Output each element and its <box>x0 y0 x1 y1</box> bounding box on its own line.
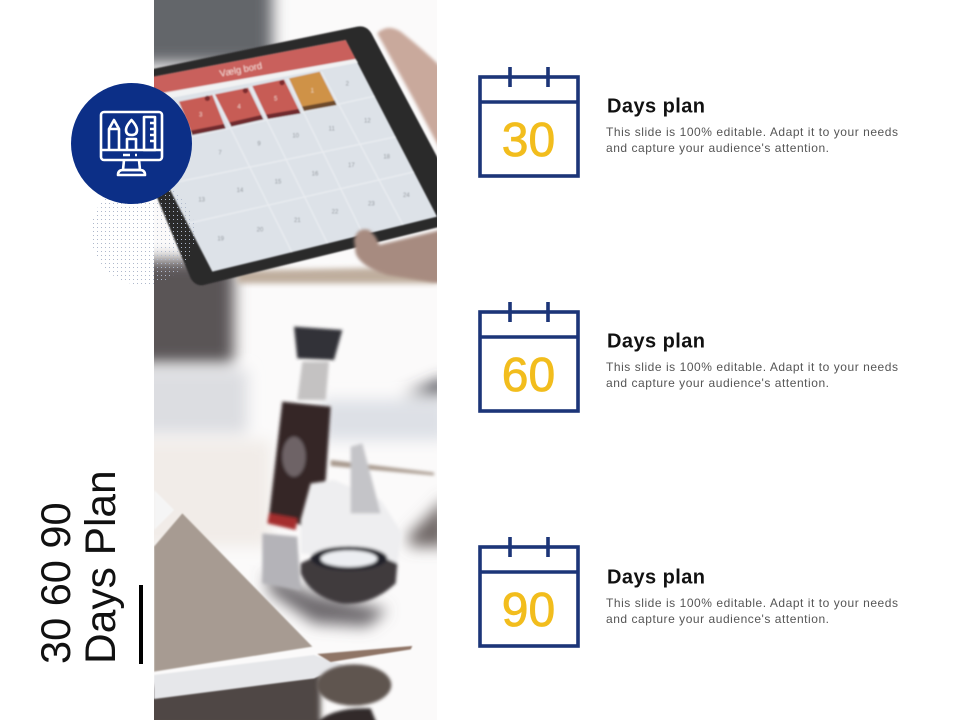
title: 30 60 90 Days Plan: Days Plan <box>78 470 125 664</box>
calendar tiles <box>179 72 337 135</box>
calendar header <box>154 39 356 94</box>
text block: 60 days plan: Days plan <box>607 330 705 352</box>
bottom table shadow <box>147 673 321 720</box>
bottle <box>262 327 342 590</box>
calendar numbers: 21 <box>294 218 301 224</box>
calendar numbers: 19 <box>217 236 225 242</box>
stone <box>314 664 391 720</box>
text block: 30 days plan <box>606 96 898 155</box>
glass jar <box>301 443 434 604</box>
calendar icon: 60: 60 <box>502 349 555 402</box>
hand behind tablet <box>376 26 437 148</box>
title: 30 60 90 Days Plan: 30 60 90 <box>32 502 79 664</box>
calendar grid lines <box>188 96 414 252</box>
calendar numbers: 23 <box>368 201 375 207</box>
calendar numbers <box>198 81 410 242</box>
text block: 30 days plan: and capture your audience's attention. <box>606 141 829 155</box>
calendar numbers: 10 <box>292 134 300 140</box>
text block: 30 days plan: This slide is 100% editable. Adapt it to your needs <box>606 125 898 139</box>
pen <box>154 655 344 699</box>
calendar numbers: 5 <box>274 97 278 103</box>
text block: 60 days plan: and capture your audience's attention. <box>606 376 829 390</box>
calendar numbers: 18 <box>383 155 391 161</box>
calendar icon: 90 <box>478 537 580 648</box>
tablet body <box>154 25 437 286</box>
icon badge: monitor with design tools <box>71 83 192 204</box>
calendar numbers: 16 <box>312 171 319 177</box>
calendar numbers: 7 <box>218 150 222 156</box>
calendar numbers: 9 <box>257 142 261 148</box>
tablet screen <box>154 39 437 272</box>
calendar numbers: 20 <box>257 227 264 233</box>
thumb and lower hand <box>354 229 441 283</box>
calendar numbers: 4 <box>237 105 241 111</box>
calendar numbers: 22 <box>332 210 339 216</box>
tablet screen: Vælg bord <box>219 61 263 79</box>
background blurred shapes <box>134 0 447 627</box>
calendar numbers: 11 <box>329 126 335 132</box>
text block: 90 days plan: This slide is 100% editable. Adapt it to your needs <box>606 596 898 610</box>
dotted halftone decoration <box>93 191 194 284</box>
calendar numbers: 1 <box>311 89 315 95</box>
calendar icon: 30 <box>478 67 580 178</box>
text block: 30 days plan: Days plan <box>607 96 705 118</box>
calendar numbers: 17 <box>348 163 355 169</box>
calendar icon: 60 <box>478 302 580 413</box>
calendar icon: 90: 90 <box>502 584 555 637</box>
text block: 90 days plan <box>606 566 898 626</box>
calendar numbers: 13 <box>198 197 206 203</box>
text block: 60 days plan: This slide is 100% editable. Adapt it to your needs <box>606 360 898 374</box>
text block: 90 days plan: Days plan <box>607 566 705 588</box>
photo: tablet calendar and desk objects <box>154 0 437 720</box>
calendar numbers: 12 <box>364 119 371 125</box>
text block: 90 days plan: and capture your audience's attention. <box>606 612 829 626</box>
paper triangle <box>154 513 312 672</box>
calendar icon: 30: 30 <box>502 114 555 167</box>
calendar numbers: 24 <box>403 193 410 199</box>
text block: 60 days plan <box>606 330 898 390</box>
calendar numbers: 15 <box>275 180 282 186</box>
card on stone <box>317 646 412 662</box>
calendar numbers: 14 <box>237 188 244 194</box>
calendar numbers: 3 <box>199 113 203 119</box>
title: 30 60 90 Days Plan <box>32 470 143 664</box>
calendar numbers: 2 <box>346 81 350 87</box>
